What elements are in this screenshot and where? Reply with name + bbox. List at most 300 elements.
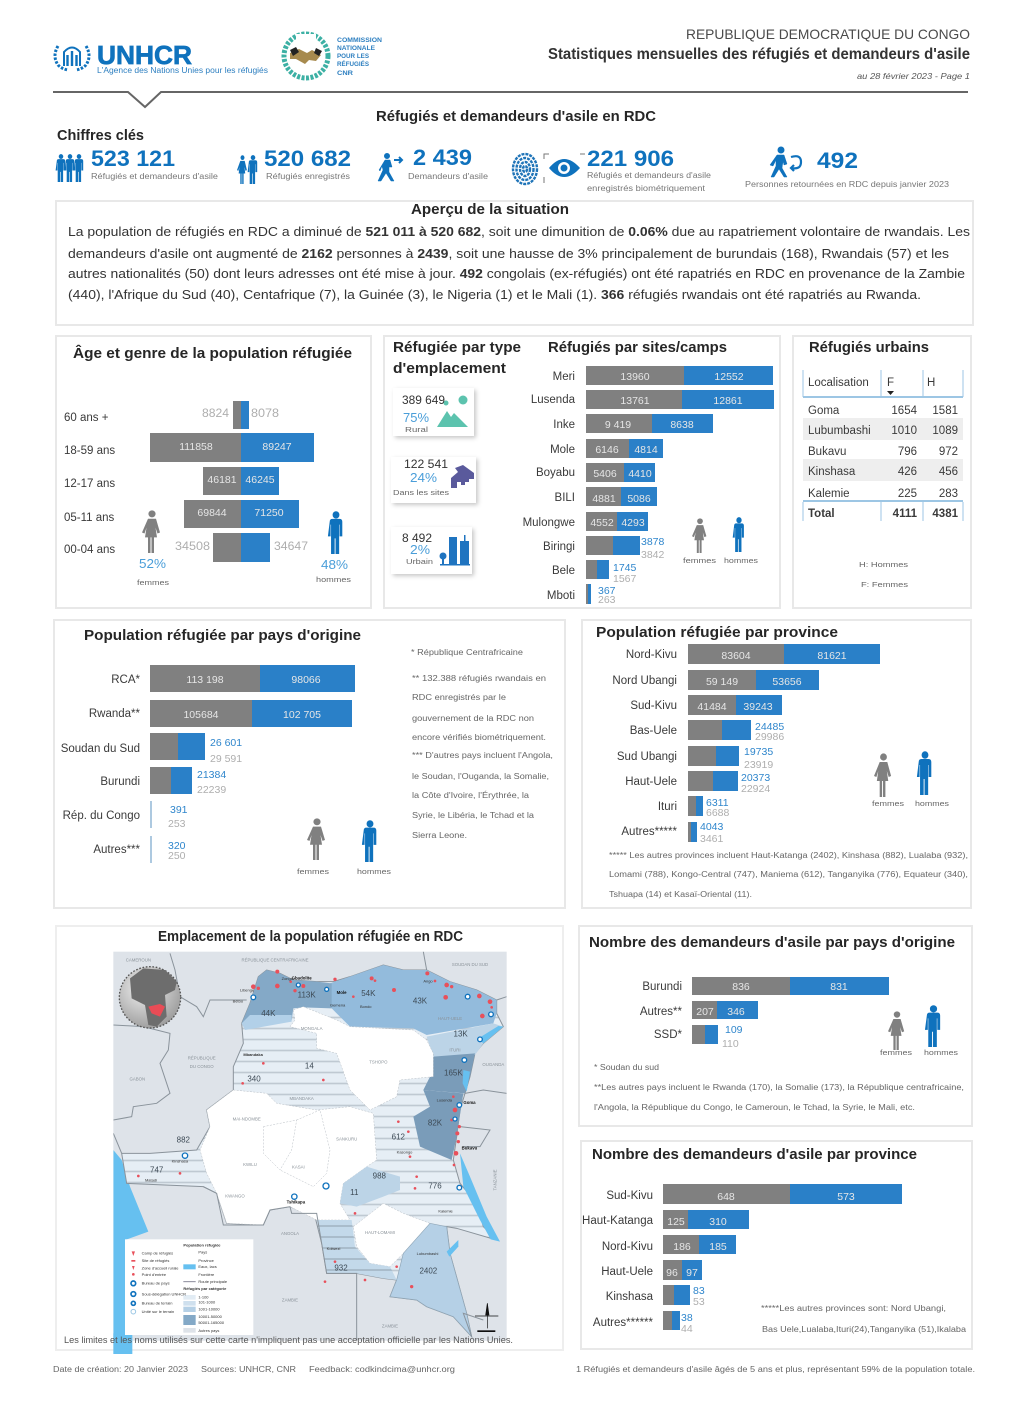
table: 426 <box>898 466 917 478</box>
legend: gender: femmes <box>297 867 329 876</box>
refugee count labels: 340 <box>247 1075 261 1084</box>
bar chart: asylum seekers by province: 186 <box>673 1241 691 1253</box>
card: sites <box>391 457 476 503</box>
bar chart: sites: Inke <box>553 419 575 431</box>
legend text: Sous-délégation UNHCR <box>142 1291 186 1296</box>
panel: âge et genre <box>56 336 371 608</box>
legend text: Zone d'accueil rurale <box>142 1265 179 1270</box>
refugee count labels: 776 <box>428 1181 442 1190</box>
refugee count labels: 11 <box>350 1188 359 1197</box>
notes: ** 132.388 réfugiés rwandais en <box>412 674 546 683</box>
legend: gender: femmes <box>683 556 716 565</box>
organisation name: COMMISSION <box>337 37 382 44</box>
icon: three people <box>56 154 83 182</box>
bar chart: sites: Lusenda <box>531 394 576 406</box>
ocean <box>113 1150 148 1341</box>
card: sites: 24% <box>410 470 437 485</box>
country and province names: KWANGO <box>225 1193 245 1198</box>
logo: Commission Nationale pour les Réfugiés <box>284 34 382 78</box>
bar chart: asylum seekers by province: 125 <box>667 1216 685 1228</box>
population pyramid: 111858 <box>179 441 213 453</box>
bar chart: provinces: Bas-Uele <box>630 725 677 737</box>
bar chart: sites <box>523 366 774 606</box>
city names: Zongo <box>282 976 294 981</box>
north arrow <box>475 1303 498 1332</box>
notes: * Soudan du sud <box>594 1063 659 1072</box>
table key: H: Hommes <box>859 560 908 569</box>
icon: houses <box>451 465 474 488</box>
legend text: Eaux, lacs <box>198 1264 217 1269</box>
bar chart: asylum seekers by country <box>640 977 889 1050</box>
country and province names: TANZANIE <box>493 1169 498 1191</box>
legend: gender: hommes <box>357 867 391 876</box>
bar chart: countries: 253 <box>168 818 186 830</box>
legend markers <box>131 1251 135 1276</box>
bar chart: sites: 4293 <box>621 517 645 529</box>
refugee count labels: 14 <box>305 1061 314 1070</box>
heading: Emplacement de la population réfugiée en RDC <box>158 929 463 945</box>
icon: woman 52%: 52% <box>139 556 166 571</box>
heading: Population réfugiée par province <box>596 625 838 641</box>
bar chart: sites: 4552 <box>590 517 614 529</box>
bar chart: sites: Bele <box>552 565 575 577</box>
footnote: 1 Réfugiés et demandeurs d'asile âgés de 5 ans et plus, représentant 59% de la population totale. <box>576 1365 975 1374</box>
city names: Lusenda <box>437 1098 453 1103</box>
key figure: biometric registration <box>513 146 712 193</box>
city names: Gbadolite <box>292 975 312 980</box>
country and province names: MONGALA <box>301 1026 323 1031</box>
refugee count labels: 54K <box>361 989 376 998</box>
age labels: 60 ans + <box>64 412 109 424</box>
legend text: Bureau de terrain <box>142 1301 172 1306</box>
bar chart: sites: 13960 <box>620 371 650 383</box>
refugee count labels: 43K <box>413 997 428 1006</box>
organisation name <box>337 37 382 77</box>
overview text: La population de réfugiés en RDC a diminué de 521 011 à 520 682 , soit une dimunition de 0.06% due au rapatriement volontaire de rwandais. Les <box>68 224 971 239</box>
table: 1654 <box>891 405 918 417</box>
population pyramid: 71250 <box>254 507 284 519</box>
card: urbain <box>391 527 472 574</box>
bar chart: asylum seekers by country: Autres** <box>640 1006 683 1018</box>
card: sites: Dans les sites <box>393 488 449 497</box>
bar chart: countries: 105684 <box>183 709 219 721</box>
bar chart: provinces: 53656 <box>772 676 802 688</box>
notes: Sierra Leone. <box>412 831 467 840</box>
notes: ***** Les autres provinces incluent Haut-Katanga (2402), Kinshasa (882), Lualaba (932), <box>609 851 968 860</box>
footer: sources: Feedback: codkindcima@unhcr.org <box>309 1365 455 1374</box>
bar chart: asylum seekers by province: 310 <box>709 1216 727 1228</box>
icon: woman and man <box>237 155 257 184</box>
bar chart: asylum seekers by country: SSD* <box>654 1029 683 1041</box>
panel: population par province <box>582 620 971 908</box>
globe inset <box>119 967 181 1028</box>
table: 456 <box>939 466 958 478</box>
heading: Population réfugiée par pays d'origine <box>84 628 361 644</box>
age labels: 00-04 ans <box>64 544 115 556</box>
legend text: 50001-165000 <box>198 1320 225 1325</box>
heading: type d'emplacement <box>393 340 521 377</box>
bar chart: provinces: 6688 <box>706 807 730 819</box>
notes: Syrie, le Libéria, le Tchad et la <box>412 811 535 820</box>
bar chart: countries: Burundi <box>100 776 140 788</box>
notes: RDC enregistrés par le <box>412 693 507 702</box>
table <box>803 370 963 521</box>
bar chart: asylum seekers by province: 573 <box>837 1191 855 1203</box>
bar chart: asylum seekers by province: Nord-Kivu <box>602 1241 653 1253</box>
legend text: 1-100 <box>198 1294 209 1299</box>
notes: gouvernement de la RDC non <box>412 714 534 723</box>
card: urbain: 2% <box>410 542 430 557</box>
legend text <box>142 1242 228 1333</box>
country and province names: RÉPUBLIQUE <box>188 1055 216 1060</box>
bar chart: countries: Soudan du Sud <box>61 743 140 755</box>
legend: gender <box>297 818 391 876</box>
legend: gender: hommes <box>724 556 758 565</box>
bar chart: countries: Rwanda** <box>89 708 141 720</box>
table: F <box>887 377 894 389</box>
heading: Aperçu de la situation <box>411 202 569 218</box>
bar chart: countries <box>61 665 355 863</box>
bar chart: asylum seekers by province: Haut-Katanga <box>582 1215 654 1227</box>
icon: city <box>440 535 470 566</box>
key figure: biometric registration: 221 906 <box>587 146 674 171</box>
bar chart: asylum seekers by country: 207 <box>696 1006 714 1018</box>
table: 1089 <box>932 425 958 437</box>
country and province names: CAMEROUN <box>126 957 151 962</box>
table: 225 <box>898 488 917 500</box>
bar chart: provinces: Sud-Kivu <box>630 700 677 712</box>
age labels <box>64 412 115 556</box>
katanga <box>390 1223 472 1337</box>
legend text: 1001-10000 <box>198 1307 220 1312</box>
lualaba <box>317 1220 397 1280</box>
legend: gender: hommes <box>915 799 949 808</box>
bar chart: asylum seekers by province: Haut-Uele <box>601 1266 653 1278</box>
key figure: registered refugees: Réfugiés enregistrés <box>266 172 350 181</box>
population pyramid: 89247 <box>262 441 292 453</box>
key figure: returnees: Personnes retournées en RDC depuis janvier 2023 <box>745 180 950 189</box>
notes: * République Centrafricaine <box>411 648 524 657</box>
bar chart: sites: Biringi <box>543 541 575 553</box>
notes: Lomami (788), Kongo-Central (747), Maniema (612), Tanganyika (776), Equateur (340), <box>609 870 968 879</box>
bar chart: sites: 1567 <box>613 573 637 585</box>
bar chart: provinces: 23919 <box>744 759 773 771</box>
overview text: (440), l'Afrique du Sud (40), Centafrique (7), la Guinée (3), le Nigeria (1) et le Mali (1). 366 réfugiés rwandais ont été rapatriés au Rwanda. <box>68 287 921 302</box>
tagline: L'Agence des Nations Unies pour les réfugiés <box>97 66 268 75</box>
bar chart: countries: 22239 <box>197 784 226 796</box>
lakes <box>447 1026 503 1257</box>
bar chart: asylum seekers by province: Autres****** <box>593 1317 654 1329</box>
country and province names: KWILU <box>243 1162 257 1167</box>
table: Kalemie <box>808 488 850 500</box>
footer: sources <box>53 1365 455 1374</box>
bar chart: provinces: 59 149 <box>706 676 738 688</box>
age labels: 12-17 ans <box>64 478 115 490</box>
bar chart: sites: 5086 <box>627 493 651 505</box>
card: sites: 122 541 <box>404 459 448 471</box>
icon: wreath and handshake <box>284 34 328 78</box>
country and province names: OUGANDA <box>482 1062 504 1067</box>
bar chart: provinces: 81621 <box>817 650 847 662</box>
legend text: Réfugiés par catégorie <box>183 1286 227 1291</box>
bar chart: sites: 263 <box>598 594 616 606</box>
bar chart: sites: Mole <box>550 444 575 456</box>
icon: man 48%: hommes <box>316 575 351 584</box>
refugee count labels: 82K <box>428 1118 443 1127</box>
organisation name: POUR LES <box>337 53 370 60</box>
legend: gender: femmes <box>872 799 904 808</box>
province: default DRC <box>122 965 503 1337</box>
legend text: Camp de réfugiés <box>142 1251 173 1256</box>
bar chart: sites: 9 419 <box>605 419 631 431</box>
city names: Bondo <box>360 1004 372 1009</box>
bar chart: sites: 12552 <box>714 371 744 383</box>
kivus <box>423 1053 475 1093</box>
legend text: Frontière <box>198 1272 215 1277</box>
bar chart: sites: 4410 <box>628 468 652 480</box>
bar chart: provinces: Nord Ubangi <box>612 675 677 687</box>
city names: Mole <box>337 990 347 995</box>
notes: *****Les autres provinces sont: Nord Ubangi, <box>761 1304 946 1313</box>
country and province names: HAUT-LOMAMI <box>365 1230 395 1235</box>
bar chart: provinces: 24485 <box>755 721 784 733</box>
bar chart: countries: Autres*** <box>93 844 141 856</box>
icon: fingerprint <box>513 154 537 184</box>
country and province names: SANKURU <box>336 1137 357 1142</box>
bar chart: asylum seekers by country: 831 <box>830 981 848 993</box>
legend text: Point d'entrée <box>142 1272 167 1277</box>
bar chart: asylum seekers by province: 96 <box>666 1267 678 1279</box>
bar chart: provinces: 29986 <box>755 731 784 743</box>
notes <box>761 1304 967 1334</box>
key figure: refugees and asylum seekers: 523 121 <box>91 146 175 171</box>
footer: sources: Sources: UNHCR, CNR <box>201 1365 296 1374</box>
bar chart: asylum seekers by province: 185 <box>709 1241 727 1253</box>
bar chart: sites: 12861 <box>713 395 743 407</box>
city names: Libenge <box>240 987 255 992</box>
table: 1010 <box>891 425 917 437</box>
city names: Lubumbashi <box>417 1251 438 1256</box>
table: Kinshasa <box>808 466 856 478</box>
table: Total <box>808 508 835 520</box>
city names: Tshikapa <box>287 1199 306 1204</box>
key figure: biometric registration: enregistrés biométriquement <box>587 184 706 193</box>
country and province names: ZAMBIE <box>282 1298 298 1303</box>
bar chart: sites: 8638 <box>670 419 694 431</box>
country and province names: SOUDAN DU SUD <box>452 962 488 967</box>
country and province names: DU CONGO <box>190 1064 214 1069</box>
legend text: Autres pays <box>198 1328 219 1333</box>
card: urbain: 8 492 <box>402 533 432 545</box>
panel: population par pays d'origine <box>54 620 565 908</box>
bar chart: sites: 367 <box>598 585 616 597</box>
bar chart: countries: 102 705 <box>283 709 321 721</box>
legend: gender <box>872 751 949 808</box>
bar chart: sites: 3842 <box>641 549 665 561</box>
heading: type d'emplacement: Réfugiée par type <box>393 340 521 356</box>
heading: Âge et genre de la population réfugiée <box>73 344 352 362</box>
heading: Réfugiés urbains <box>809 340 929 356</box>
city names: Bétou <box>233 999 243 1004</box>
legend text: Site de réfugiés <box>142 1258 169 1263</box>
legend text: Bureau de pays <box>142 1281 170 1286</box>
age labels: 05-11 ans <box>64 512 115 524</box>
notes <box>411 648 553 840</box>
refugee count labels: 882 <box>177 1135 191 1144</box>
country and province names: ANGOLA <box>281 1231 299 1236</box>
icon: man 48% <box>316 511 351 584</box>
table: H <box>927 377 935 389</box>
notes <box>594 1063 964 1112</box>
bar chart: provinces: 41484 <box>697 701 727 713</box>
bar chart: countries: 250 <box>168 850 186 862</box>
table: 1581 <box>932 405 958 417</box>
heading: type d'emplacement: d'emplacement <box>393 361 506 377</box>
city names: Gemena <box>330 1003 346 1008</box>
bar chart: provinces: 22924 <box>741 783 770 795</box>
refugee count labels: 165K <box>444 1069 463 1078</box>
report title: Statistiques mensuelles des réfugiés et demandeurs d'asile <box>548 46 970 63</box>
table: 4381 <box>932 508 959 520</box>
key figure: registered refugees: 520 682 <box>264 146 351 171</box>
bar chart: provinces: 3461 <box>700 833 724 845</box>
bar chart: sites: 5406 <box>593 468 617 480</box>
bar chart: sites: 4881 <box>592 493 616 505</box>
bar chart: asylum seekers by province <box>582 1184 902 1335</box>
card: rural: 389 649 <box>402 395 445 407</box>
white provinces <box>200 1007 433 1267</box>
icon: man 48%: 48% <box>321 557 348 572</box>
table: 4111 <box>893 508 918 520</box>
bar chart: asylum seekers by province: Sud-Kivu <box>606 1190 653 1202</box>
organisation name: CNR <box>337 70 353 77</box>
country and province names: HAUT-UELE <box>438 1016 462 1021</box>
refugee count labels: 612 <box>392 1132 406 1141</box>
ituri <box>427 1023 503 1057</box>
bar chart: provinces: 39243 <box>743 701 773 713</box>
legend text: Province <box>198 1258 215 1263</box>
city names: Bukavu <box>462 1145 478 1150</box>
legend text: 101-1000 <box>198 1299 216 1304</box>
map legend <box>125 1239 253 1335</box>
key figure: returnees <box>745 147 950 189</box>
bar chart: sites: 1745 <box>613 562 637 574</box>
card: urbain: Urbain <box>406 557 433 566</box>
bar chart: sites: 13761 <box>620 395 650 407</box>
city names: Mbandaka <box>243 1052 264 1057</box>
city names: Kasongo <box>397 1149 413 1154</box>
heading: sites/camps: Réfugiés par sites/camps <box>548 340 727 356</box>
population pyramid: 34647 <box>274 541 308 553</box>
notes: **Les autres pays incluent le Rwanda (170), la Somalie (173), la République centrafricaine, <box>594 1083 964 1092</box>
table key <box>859 560 908 589</box>
table: 283 <box>939 488 958 500</box>
city names: Kinshasa <box>172 1159 189 1164</box>
wordmark: UNHCR <box>97 40 192 70</box>
bar chart: asylum seekers by province: 648 <box>717 1191 735 1203</box>
refugee count labels: 44K <box>261 1009 276 1018</box>
table: Localisation <box>808 377 869 389</box>
heading: Nombre des demandeurs d'asile par province <box>592 1147 917 1163</box>
bar chart: provinces <box>612 644 880 845</box>
country and province names: MAI-NDOMBE <box>233 1117 261 1122</box>
table: Bukavu <box>808 446 846 458</box>
legend swatches <box>183 1264 196 1333</box>
bar chart: provinces: 83604 <box>721 650 751 662</box>
key figure: asylum seekers: Demandeurs d'asile <box>408 172 489 181</box>
logo: UNHCR <box>55 40 268 75</box>
bar chart: asylum seekers by province: 44 <box>681 1323 693 1335</box>
notes: la Côte d'Ivoire, l'Érythrée, la <box>412 791 530 800</box>
bar chart: sites: Mboti <box>547 590 575 602</box>
bar chart: provinces: 20373 <box>741 772 770 784</box>
bar chart: provinces: 19735 <box>744 746 773 758</box>
organisation name: RÉFUGIÉS <box>337 59 370 68</box>
bar chart: countries: 26 601 <box>210 737 242 749</box>
card: rural: 75% <box>403 410 429 425</box>
bar chart: provinces: Haut-Uele <box>625 776 677 788</box>
bar chart: sites: 3878 <box>641 536 665 548</box>
footer: sources: Date de création: 20 Janvier 2023 <box>53 1365 189 1374</box>
country and province names: KASAI <box>292 1164 305 1169</box>
population pyramid: 69844 <box>197 507 227 519</box>
bar chart: asylum seekers by country: 836 <box>732 981 750 993</box>
city names: Ango <box>423 979 433 984</box>
bar chart: provinces: 6311 <box>706 797 729 809</box>
legend: gender: femmes <box>880 1048 912 1057</box>
bar chart: asylum seekers by country: 110 <box>722 1038 739 1050</box>
refugee count labels: 113K <box>298 990 316 999</box>
notes: Tshuapa (14) et Kasaï-Oriental (11). <box>609 890 752 899</box>
table key: F: Femmes <box>861 580 908 589</box>
country title: REPUBLIQUE DEMOCRATIQUE DU CONGO <box>686 26 970 42</box>
bar chart: countries: RCA* <box>111 674 141 686</box>
heading: Réfugiés et demandeurs d'asile en RDC: Réfugiés et demandeurs d'asile en RDC <box>376 109 657 125</box>
neighbouring borders <box>113 952 507 1341</box>
population pyramid <box>150 401 314 562</box>
overview text: demandeurs d'asile ont augmenté de 2162 personnes à 2439, soit une hausse de 3% principalement de burundais (168), Rwandais (57) et les <box>68 246 950 261</box>
bar chart: provinces: Sud Ubangi <box>617 751 677 763</box>
refugee count labels: 988 <box>373 1172 387 1181</box>
legend text: Unité sur le terrain <box>142 1309 174 1314</box>
legend text: 10001-50000 <box>198 1314 223 1319</box>
bar chart: provinces: 4043 <box>700 821 724 833</box>
panel: carte <box>56 926 563 1354</box>
heading: Chiffres clés: Chiffres clés <box>57 128 144 144</box>
bar chart: asylum seekers by province: 83 <box>693 1285 705 1297</box>
population pyramid: 8824 <box>202 408 230 420</box>
icon: mountains <box>437 396 468 427</box>
bar chart: asylum seekers by country: 109 <box>725 1024 743 1036</box>
notes: l'Angola, la République du Congo, le Cameroun, le Tchad, la Syrie, le Mali, etc. <box>594 1103 915 1112</box>
bar chart: countries: Rép. du Congo <box>63 810 140 822</box>
page header text <box>548 26 970 81</box>
icon: person with return arrow <box>770 147 801 177</box>
population pyramid: 46245 <box>245 474 275 486</box>
refugee count labels: 747 <box>150 1165 164 1174</box>
bar chart: countries: 98066 <box>291 674 321 686</box>
notes: le Soudan, l'Ouganda, la Somalie, <box>412 772 549 781</box>
city names <box>145 975 478 1256</box>
refugee count labels: 932 <box>334 1264 348 1273</box>
key figure: biometric registration: Réfugiés et demandeurs d'asile <box>587 171 712 180</box>
city names: Kalemie <box>438 1209 454 1214</box>
notes: encore vérifiés biométriquement. <box>412 733 546 742</box>
notes: *** D'autres pays incluent l'Angola, <box>412 751 553 760</box>
bar chart: asylum seekers by country: Burundi <box>642 981 682 993</box>
map disclaimer: Les limites et les noms utilisés sur cette carte n'impliquent pas une acceptation officielle par les Nations Unies. <box>64 1335 513 1345</box>
bar chart: asylum seekers by country: 346 <box>727 1006 745 1018</box>
